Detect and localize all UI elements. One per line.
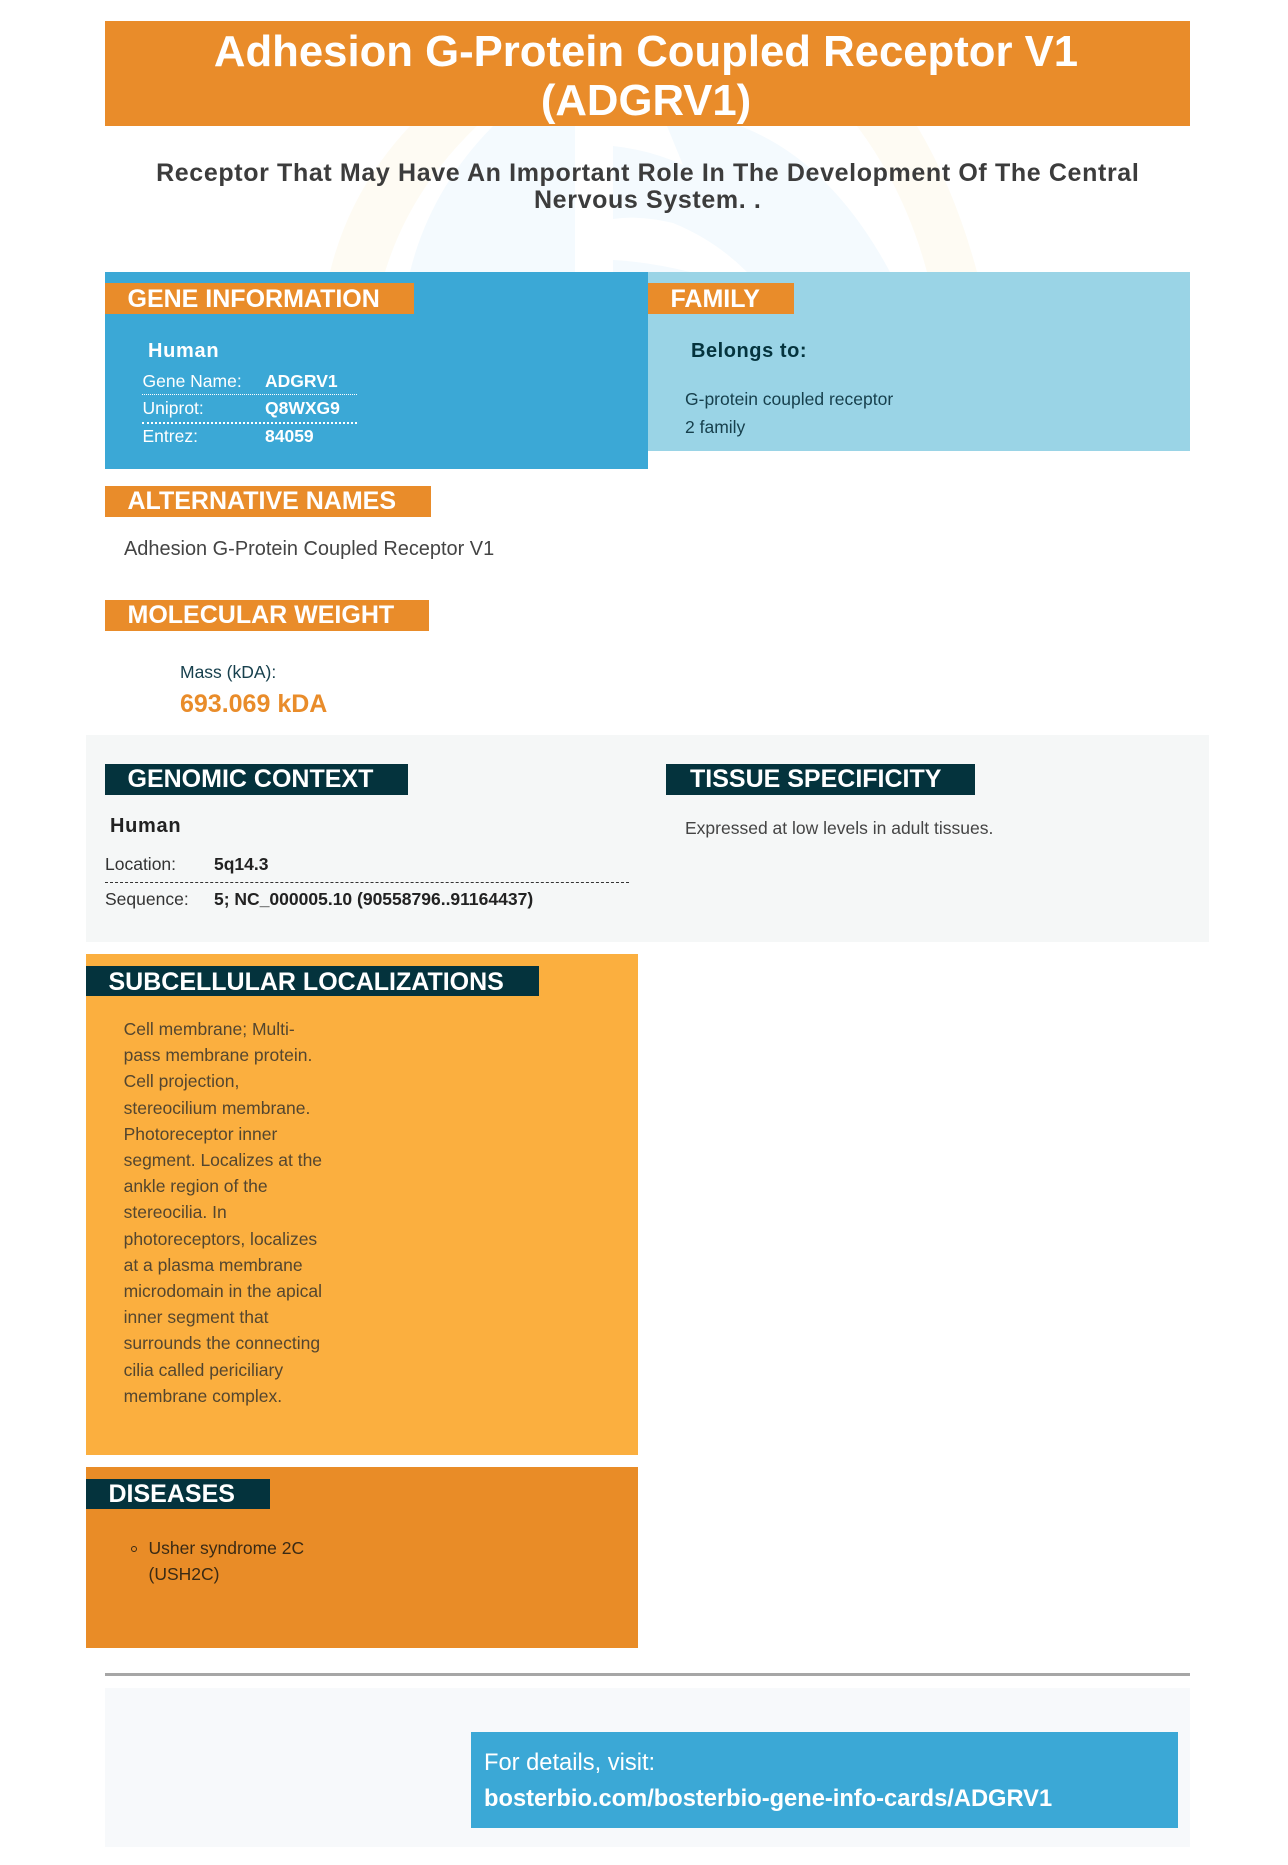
callout: details link (471, 1732, 1178, 1828)
heading: family (648, 283, 794, 314)
localization text: Photoreceptor inner (124, 1124, 277, 1144)
uniprot row: Uniprot: (142, 398, 204, 418)
heading: genomic context: GENOMIC CONTEXT (128, 765, 373, 793)
localization text: surrounds the connecting (124, 1333, 320, 1353)
location row (105, 854, 268, 874)
gene name row (142, 371, 338, 391)
family text line 2: 2 family (685, 417, 745, 437)
localization text: photoreceptors, localizes (124, 1229, 317, 1249)
heading: family: FAMILY (670, 285, 760, 313)
localization text: microdomain in the apical (124, 1281, 322, 1301)
disease text: Usher syndrome 2C (148, 1538, 304, 1558)
localization text: pass membrane protein. (124, 1045, 312, 1065)
localization text: stereocilium membrane. (124, 1098, 310, 1118)
entrez row (142, 426, 314, 446)
disease text: (USH2C) (148, 1564, 219, 1584)
uniprot row (142, 398, 340, 418)
panel: genomic context and tissue specificity (86, 735, 1209, 942)
uniprot row: Q8WXG9 (265, 398, 340, 418)
gene name row: ADGRV1 (265, 371, 338, 391)
localization text: membrane complex. (124, 1386, 282, 1406)
family text: G-protein coupled receptor (685, 389, 893, 409)
details url: bosterbio.com/bosterbio-gene-info-cards/ADGRV1 (484, 1786, 1052, 1812)
disease text (148, 1538, 304, 1584)
title banner: (ADGRV1) (541, 76, 751, 125)
heading: diseases (86, 1479, 270, 1509)
sequence row: Sequence: (105, 889, 189, 909)
heading: diseases: DISEASES (108, 1480, 235, 1508)
sequence row: 5; NC_000005.10 (90558796..91164437) (214, 889, 533, 909)
panel: family (648, 272, 1190, 451)
location row: 5q14.3 (214, 854, 268, 874)
tissue specificity text: Expressed at low levels in adult tissues. (685, 818, 993, 838)
footer panel (105, 1688, 1190, 1847)
gene name row: Gene Name: (142, 371, 242, 391)
localization text: segment. Localizes at the (124, 1150, 322, 1170)
heading: tissue specificity: TISSUE SPECIFICITY (690, 765, 941, 793)
title banner: Adhesion G-Protein Coupled Receptor V1 (214, 27, 1078, 76)
subtitle (156, 158, 1139, 214)
species label: Human (110, 815, 181, 837)
background watermark logo (330, 126, 977, 272)
heading: molecular weight: MOLECULAR WEIGHT (128, 601, 394, 629)
mass value: 693.069 kDA (180, 690, 327, 718)
panel: diseases (86, 1467, 638, 1648)
localization text: Cell projection, (124, 1071, 239, 1091)
belongs to label: Belongs to: (691, 340, 807, 362)
details label: For details, visit: (484, 1750, 655, 1776)
localization text: at a plasma membrane (124, 1255, 303, 1275)
localization text: Cell membrane; Multi- (124, 1019, 295, 1039)
heading: subcellular localizations: SUBCELLULAR LOCALIZATIONS (108, 968, 504, 996)
localization text: stereocilia. In (124, 1202, 227, 1222)
entrez row: 84059 (265, 426, 314, 446)
bullet marker (131, 1546, 137, 1552)
localization text (124, 1019, 322, 1406)
entrez row: Entrez: (142, 426, 198, 446)
alternative names text: Adhesion G-Protein Coupled Receptor V1 (124, 538, 494, 560)
mass label: Mass (kDA): (180, 662, 276, 682)
species label: Human (148, 340, 219, 362)
panel: subcellular localizations (86, 954, 638, 1455)
title banner (105, 21, 1190, 126)
location row: Location: (105, 854, 176, 874)
subtitle: Nervous System. . (534, 186, 761, 214)
localization text: inner segment that (124, 1307, 269, 1327)
subtitle: Receptor That May Have An Important Role In The Development Of The Central (156, 158, 1139, 186)
localization text: cilia called periciliary (124, 1360, 283, 1380)
heading: alternative names: ALTERNATIVE NAMES (128, 487, 396, 515)
panel: gene information (105, 272, 648, 469)
heading: gene information: GENE INFORMATION (128, 285, 380, 313)
localization text: ankle region of the (124, 1176, 268, 1196)
